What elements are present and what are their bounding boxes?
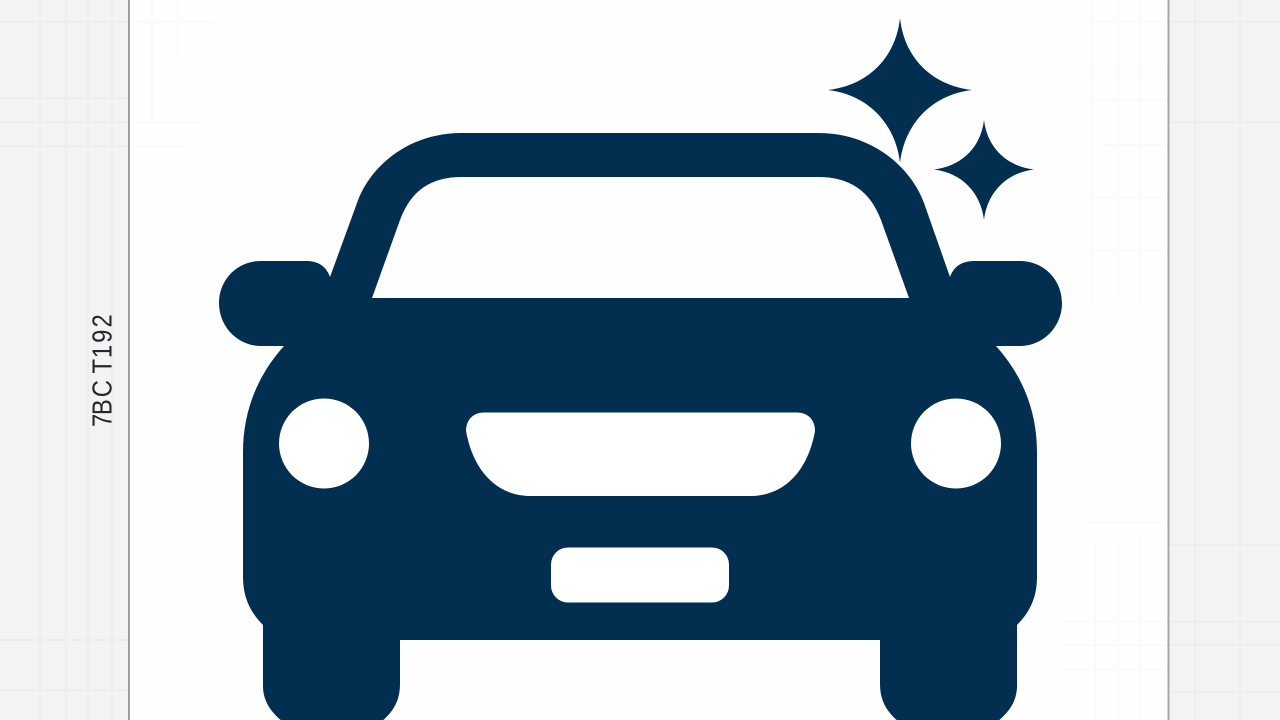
grille xyxy=(466,412,815,496)
icon: small sparkle xyxy=(934,120,1034,220)
car body xyxy=(219,133,1062,720)
right frame line xyxy=(1168,0,1170,720)
left headlight xyxy=(279,398,369,488)
left frame line xyxy=(128,0,130,720)
vertical code label: 7BC T192 xyxy=(86,314,118,427)
icon: car front view xyxy=(219,133,1062,720)
icon: large sparkle xyxy=(828,18,972,163)
licence plate xyxy=(551,548,729,602)
right headlight xyxy=(911,398,1001,488)
